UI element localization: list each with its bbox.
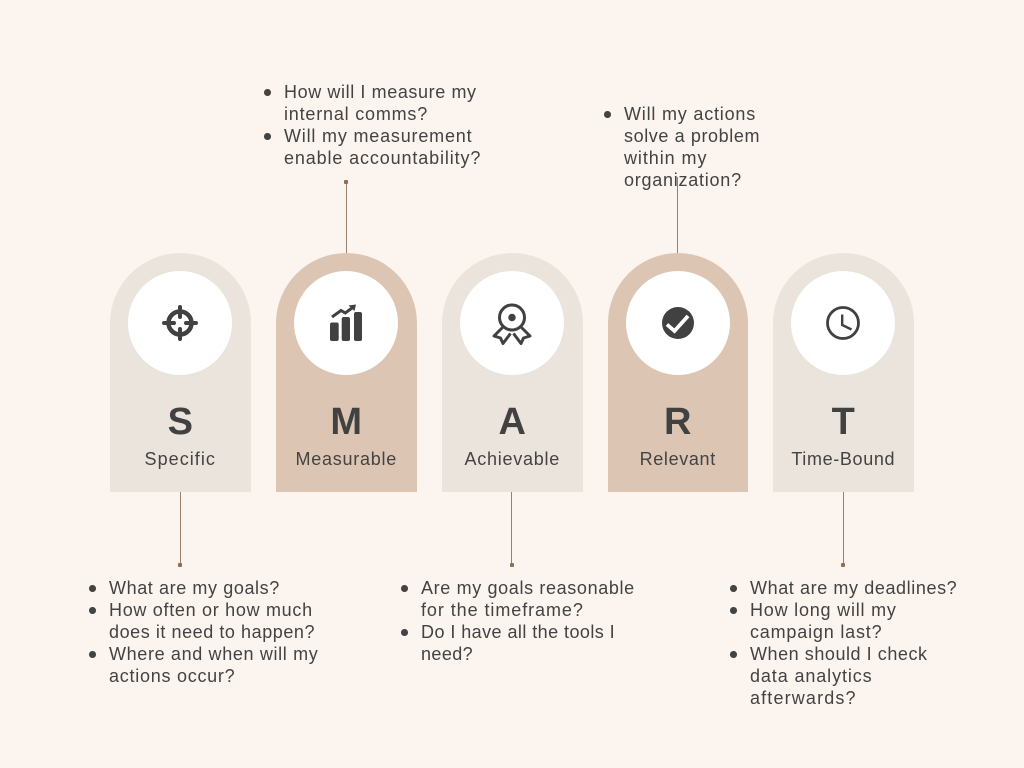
text block: Specific questions: does it need to happen?: [109, 622, 315, 642]
connector: Specific: [180, 492, 181, 565]
connector dot: Achievable: [510, 563, 514, 567]
text block: Specific questions: actions occur?: [109, 666, 235, 686]
text block: Specific questions: How often or how much: [109, 600, 313, 620]
text block: Achievable questions: [401, 578, 635, 664]
text block: Time-Bound questions: What are my deadlines?: [750, 578, 957, 598]
text block: Measurable questions: internal comms?: [284, 104, 428, 124]
panel: Relevant: [608, 253, 748, 492]
text block: Relevant questions: organization?: [624, 170, 742, 190]
text block: Specific questions: What are my goals?: [109, 578, 280, 598]
letter M: M: [330, 400, 362, 442]
letter S: S: [168, 400, 193, 442]
text block: Achievable questions: Are my goals reasonable: [421, 578, 635, 598]
connector: Measurable: [346, 181, 347, 253]
text block: Time-Bound questions: How long will my: [750, 600, 897, 620]
text block: Specific questions: Where and when will my: [109, 644, 318, 664]
text block: Time-Bound questions: data analytics: [750, 666, 873, 686]
icon: award ribbon: [460, 271, 564, 375]
connector dot: Measurable: [344, 180, 348, 184]
connector dot: Specific: [178, 563, 182, 567]
label: Specific: Specific: [145, 449, 216, 469]
text block: Measurable questions: enable accountability?: [284, 148, 481, 168]
connector: Relevant: [677, 177, 678, 253]
label: Achievable: Achievable: [464, 449, 560, 469]
text block: Time-Bound questions: [730, 578, 957, 708]
text block: Time-Bound questions: When should I check: [750, 644, 928, 664]
text block: Relevant questions: [604, 104, 760, 190]
text block: Relevant questions: solve a problem: [624, 126, 760, 146]
icon: target crosshair: [128, 271, 232, 375]
icon: check mark badge: [626, 271, 730, 375]
text block: Relevant questions: Will my actions: [624, 104, 756, 124]
panel: Measurable: [276, 253, 416, 492]
icon: rising bar chart: [294, 271, 398, 375]
icon: clock: [791, 271, 895, 375]
letter T: T: [832, 400, 855, 442]
text block: Measurable questions: [264, 82, 481, 168]
text block: Achievable questions: need?: [421, 644, 473, 664]
label: Measurable: Measurable: [295, 449, 397, 469]
text block: Time-Bound questions: campaign last?: [750, 622, 882, 642]
text block: Measurable questions: Will my measurement: [284, 126, 472, 146]
letter R: R: [664, 400, 691, 442]
text block: Time-Bound questions: afterwards?: [750, 688, 857, 708]
text block: Specific questions: [89, 578, 318, 686]
text block: Achievable questions: Do I have all the tools I: [421, 622, 615, 642]
connector: Achievable: [511, 492, 512, 565]
connector: Time-Bound: [843, 492, 844, 565]
panel: Time-Bound: [773, 253, 914, 492]
text block: Measurable questions: How will I measure my: [284, 82, 477, 102]
text block: Achievable questions: for the timeframe?: [421, 600, 584, 620]
text block: Relevant questions: within my: [624, 148, 707, 168]
panel: Achievable: [442, 253, 582, 492]
label: Time-Bound: Time-Bound: [791, 449, 895, 469]
letter A: A: [499, 400, 526, 442]
connector dot: Time-Bound: [841, 563, 845, 567]
label: Relevant: Relevant: [640, 449, 716, 469]
panel: Specific: [110, 253, 250, 492]
